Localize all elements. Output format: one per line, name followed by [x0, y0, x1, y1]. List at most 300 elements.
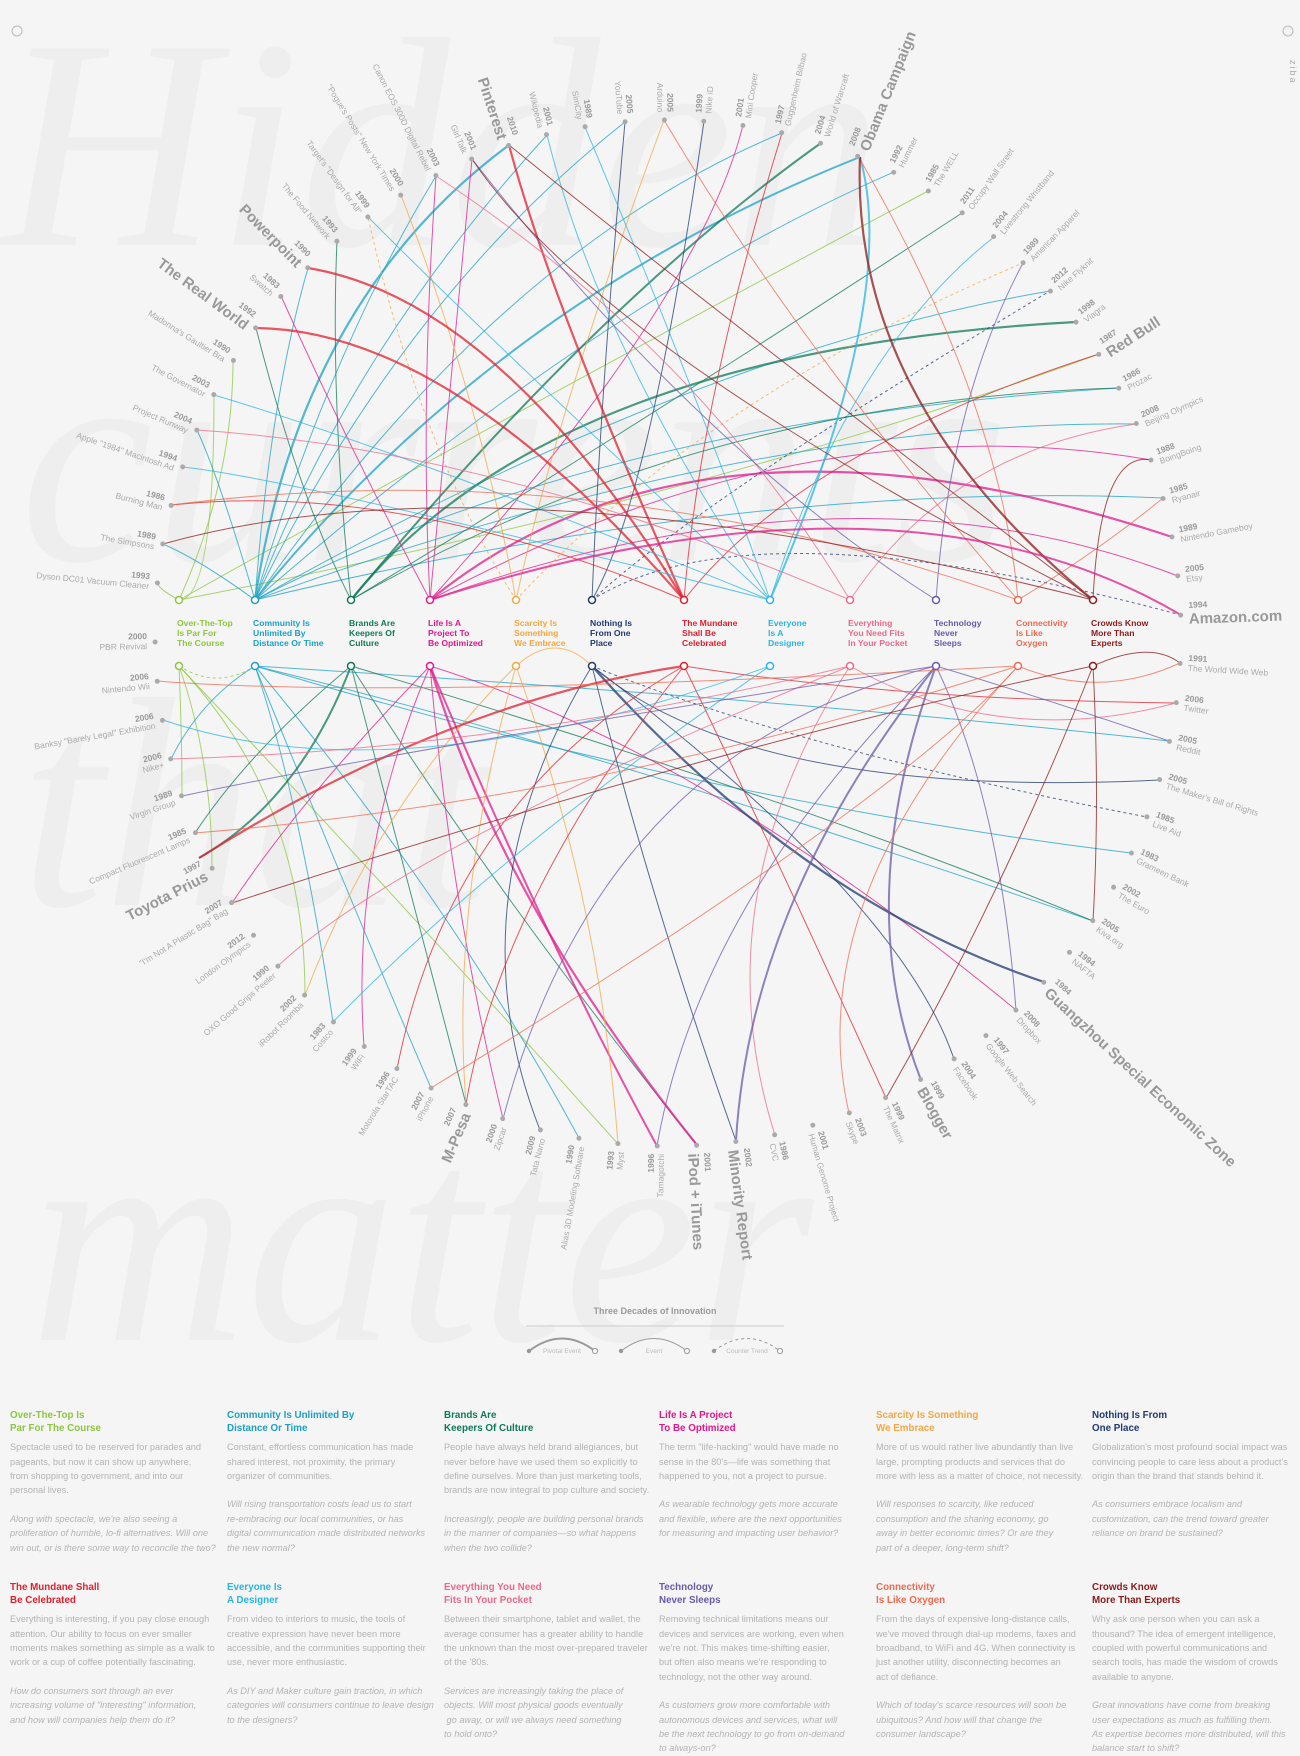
event nodes and labels: right side	[684, 25, 1282, 1261]
description: Connectivity: Connectivity	[876, 1582, 935, 1593]
logo ziba: ziba	[1288, 60, 1298, 85]
description: Crowds: Crowds Know	[1092, 1582, 1157, 1593]
event nodes and labels: right side: Twitter	[1183, 703, 1209, 716]
description: Brands: never before have we used them so explicitly to	[444, 1457, 638, 1467]
description: Over-The-Top: Par For The Course	[10, 1423, 101, 1434]
description: Crowds	[1092, 1582, 1286, 1753]
category labels: Experts	[1091, 638, 1123, 648]
description: Scarcity: Scarcity Is Something	[876, 1410, 978, 1421]
event nodes and labels: right side: Nike Flyknit	[1056, 255, 1096, 292]
description: Connectivity	[876, 1582, 1076, 1739]
event nodes and labels: right side: Livestrong Wristband	[998, 168, 1056, 236]
description: Brands: brands are now integral to pop culture and society.	[444, 1485, 649, 1495]
event nodes and labels: right side: 2005	[1185, 562, 1205, 574]
description: Everyone Is A Designer	[226, 1582, 434, 1725]
event nodes and labels: left side: 1990	[211, 337, 233, 355]
event nodes and labels: left side: Nike+	[141, 760, 165, 775]
background title text: that	[20, 638, 497, 970]
event nodes and labels: right side: 1994	[1076, 949, 1098, 968]
category labels: Unlimited By	[253, 628, 306, 638]
event nodes and labels: right side: iPod + iTunes	[684, 1153, 706, 1251]
connection lines	[157, 120, 1181, 1146]
description: Crowds: balance start to shift?	[1092, 1743, 1179, 1753]
description: Connectivity: we've moved through dial-up modems, faxes and	[876, 1629, 1076, 1639]
event nodes and labels: left side: 2006	[142, 750, 163, 764]
category labels: Celebrated	[682, 638, 726, 648]
description: Mundane: Everything is interesting, if you pay close enough	[10, 1614, 209, 1624]
event nodes and labels: right side: 2005	[1177, 732, 1198, 746]
event nodes and labels: right side: Occupy Wall Street	[966, 146, 1016, 211]
category labels: The Mundane	[682, 618, 738, 628]
description: Over-The-Top: personal lives.	[10, 1485, 69, 1495]
event nodes and labels: right side: Grameen Bank	[1135, 856, 1191, 889]
description: Nothing Is From One Place: convincing people to care less about a product's	[1092, 1457, 1288, 1467]
description: Community: re-embracing our local communities, or has	[227, 1514, 403, 1524]
description: Crowds: thousand? The idea of emergent intelligence,	[1092, 1629, 1276, 1639]
description: Over-The-Top	[10, 1410, 216, 1553]
event nodes and labels: left side: Burning Man	[114, 490, 164, 512]
description: Brands	[444, 1410, 649, 1553]
event nodes and labels: left side: 2005	[624, 94, 635, 114]
category labels: Something	[514, 628, 558, 638]
description: Crowds: As expertise becomes more distributed, will this	[1092, 1729, 1286, 1739]
event nodes and labels: left side: 1997	[181, 859, 203, 876]
description: Connectivity: consumer landscape?	[876, 1729, 966, 1739]
event nodes and labels: right side: 1992	[887, 143, 905, 165]
category labels: Is A	[768, 628, 783, 638]
description: Brands: define ourselves. More than just marketing tools,	[444, 1471, 642, 1481]
description: Scarcity: more with less as a matter of choice, not necessity.	[876, 1471, 1083, 1481]
event nodes and labels: left side: 1989	[582, 98, 595, 119]
category labels: Crowds Know	[1091, 618, 1149, 628]
event nodes and labels: right side: 2001	[816, 1130, 831, 1151]
description: Technology: autonomous devices and services, what will	[659, 1715, 837, 1725]
event nodes and labels: right side: 1988	[1155, 441, 1176, 456]
description: Connectivity: Which of today's scarce resources will soon be	[876, 1700, 1066, 1710]
description: Over-The-Top: from shopping to government, and into our	[10, 1471, 183, 1481]
description: Crowds: user expectations as much as fulfilling them.	[1092, 1715, 1272, 1725]
event nodes and labels: left side: 2007	[442, 1106, 458, 1127]
category labels: Be Optimized	[428, 638, 483, 648]
category labels: Designer	[768, 638, 805, 648]
description: Nothing Is From One Place: As consumers embrace localism and	[1092, 1499, 1242, 1509]
description: Community: Constant, effortless communication has made	[227, 1442, 413, 1452]
description: Crowds: search tools, has made the wisdom of crowds	[1092, 1657, 1278, 1667]
event nodes and labels: right side: Guggenheim Bilbao	[782, 52, 809, 127]
event nodes and labels: left side: 2006	[134, 711, 155, 724]
description: Over-The-Top: Spectacle used to be reserved for parades and	[10, 1442, 201, 1452]
description: Mundane: moments makes something as simple as a walk to	[10, 1643, 215, 1653]
event nodes and labels: right side: 2012	[1049, 265, 1070, 285]
event nodes and labels: left side: 2009	[523, 1135, 538, 1156]
description: Life Is A Project: sense in the 80's—life was something that	[659, 1457, 830, 1467]
description: Technology: Removing technical limitations means our	[659, 1614, 829, 1624]
description: Connectivity: Is Like Oxygen	[876, 1595, 945, 1606]
description: Community: digital communication made distributed networks	[227, 1528, 425, 1538]
event nodes and labels: left side: 2004	[173, 409, 194, 426]
description: Scarcity: away in better economic times? Or are they	[876, 1528, 1053, 1538]
category labels	[177, 618, 1149, 648]
event nodes and labels: left side: YouTube	[613, 80, 625, 115]
category labels: Everything	[848, 618, 892, 628]
description: Pocket: objects. Will most physical goods eventually	[444, 1700, 623, 1710]
event nodes and labels: left side: The Simpsons	[100, 532, 155, 551]
event nodes and labels: left side: Tata Nano	[528, 1137, 547, 1177]
event nodes and labels: right side: The Maker's Bill of Rights	[1165, 781, 1260, 818]
event nodes and labels: left side: Wikipedia	[527, 91, 546, 129]
event nodes and labels: left side: 1985	[166, 825, 188, 842]
event nodes and labels: right side: 2002	[742, 1147, 754, 1168]
event nodes and labels: left side: 1993	[131, 569, 151, 581]
description: Nothing Is From One Place: origin than the brand that stands behind it.	[1092, 1471, 1264, 1481]
description: Scarcity: part of a deeper, long-term shift?	[876, 1543, 1009, 1553]
event nodes and labels: left side: 2003	[190, 372, 212, 390]
description: Mundane: work or a cup of coffee potentially fascinating.	[10, 1657, 196, 1667]
description: Mundane: increasing volume of "interesting" information,	[10, 1700, 196, 1710]
description: Over-The-Top: win out, or is there some way to reconcile the two?	[10, 1543, 216, 1553]
description: Scarcity	[876, 1410, 1083, 1553]
event nodes and labels: left side: iPhone	[414, 1094, 436, 1123]
event nodes and labels: left side: Apple "1984" Macintosh Ad	[75, 430, 176, 473]
event nodes and labels: left side: 2005	[665, 93, 675, 112]
category labels: The Course	[177, 638, 224, 648]
event nodes and labels: left side: 2002	[278, 993, 298, 1013]
description: Mundane: The Mundane Shall	[10, 1582, 99, 1593]
description: Brands: Increasingly, people are building personal brands	[444, 1514, 644, 1524]
description: Pocket: Between their smartphone, tablet and wallet, the	[444, 1614, 641, 1624]
description: Community: Community Is Unlimited By	[227, 1410, 354, 1421]
event nodes and labels: left side: Banksy "Barely Legal" Exhibition	[33, 721, 156, 751]
event nodes and labels: right side: 1985	[1168, 481, 1189, 495]
event nodes and labels: right side: Etsy	[1186, 572, 1204, 584]
event nodes and labels: left side	[32, 58, 675, 1250]
description: Life Is A Project: for measuring and impacting user behavior?	[659, 1528, 838, 1538]
category labels: More Than	[1091, 628, 1134, 638]
description: Scarcity: Will responses to scarcity, like reduced	[876, 1499, 1034, 1509]
description: Everyone Is A Designer: As DIY and Maker culture gain traction, in which	[227, 1686, 422, 1696]
description: Over-The-Top: proliferation of humble, lo-fi alternatives. Will one	[10, 1528, 208, 1538]
description: Pocket: of the '80s.	[444, 1657, 489, 1667]
description: Technology: devices and services are working, even when	[659, 1629, 844, 1639]
description: Everyone Is A Designer: creative expression have never been more	[227, 1629, 401, 1639]
event nodes and labels: right side: 2005	[1100, 916, 1121, 935]
event nodes and labels: left side: 2007	[409, 1090, 427, 1111]
event nodes and labels: left side: WiFi	[349, 1052, 367, 1072]
event nodes and labels: left side: 1983	[308, 1021, 328, 1042]
description: Community: Distance Or Time	[227, 1423, 307, 1434]
description: Mundane	[10, 1582, 215, 1725]
event nodes and labels: right side: 2002	[1121, 882, 1143, 900]
event nodes and labels: left side: 2000	[484, 1122, 499, 1144]
event nodes and labels: left side: 1993	[604, 1150, 616, 1170]
description: Connectivity: ubiquitous? And how will that change the	[876, 1715, 1042, 1725]
event nodes and labels: left side: PBR Revival	[99, 641, 147, 652]
event nodes and labels: right side: Minority Report	[724, 1149, 756, 1261]
event nodes and labels: left side: iRobot Roomba	[256, 1000, 305, 1049]
legend: Pivotal Event	[543, 1348, 581, 1355]
description: Everyone Is A Designer: use, never more enthusiastic.	[227, 1657, 347, 1667]
event nodes and labels: right side: Beijing Olympics	[1143, 394, 1205, 428]
event nodes and labels: right side: Mini Cooper	[743, 72, 760, 119]
event nodes and labels: right side: Amazon.com	[1189, 608, 1282, 628]
event nodes and labels: right side: 1994	[1188, 599, 1208, 610]
event nodes and labels: right side: The Matrix	[881, 1104, 907, 1146]
event nodes and labels: right side: Live Aid	[1151, 819, 1183, 839]
event nodes and labels: left side: Powerpoint	[236, 201, 305, 271]
event nodes and labels: left side: Zipcar	[492, 1126, 509, 1151]
event nodes and labels: left side: "I'm Not A Plastic Bag" Bag	[137, 906, 230, 968]
event nodes and labels: left side: 2001	[462, 130, 479, 152]
event nodes and labels: left side: 1996	[646, 1153, 656, 1173]
description: Pocket: average consumer has a greater ability to handle	[444, 1629, 643, 1639]
description: Mundane: Be Celebrated	[10, 1595, 76, 1606]
description: Scarcity: large, prompting products and services that do	[876, 1457, 1065, 1467]
event nodes and labels: right side: 2003	[853, 1116, 869, 1138]
category labels: Scarcity Is	[514, 618, 557, 628]
event nodes and labels: right side: 2004	[959, 1059, 978, 1081]
event nodes and labels: right side: 2008	[1139, 402, 1161, 419]
event nodes and labels: left side: Myst	[614, 1151, 626, 1170]
background title text: currents	[20, 293, 1009, 625]
description: Technology: As customers grow more comfortable with	[659, 1700, 830, 1710]
event nodes and labels: right side: Skype	[844, 1120, 862, 1146]
event nodes and labels: left side: 1999	[339, 1046, 359, 1068]
description: Technology: technology, not the other way around.	[659, 1672, 812, 1682]
description: Everyone Is A Designer: Everyone Is	[227, 1582, 282, 1593]
event nodes and labels: right side: 1986	[777, 1140, 791, 1161]
description: Over-The-Top: Over-The-Top Is	[10, 1410, 84, 1421]
category labels: Over-The-Top	[177, 618, 233, 628]
event nodes and labels: left side: 1996	[373, 1069, 392, 1091]
description: Community: Will rising transportation costs lead us to start	[227, 1499, 412, 1509]
description: Mundane: attention. Our ability to focus on ever smaller	[10, 1629, 192, 1639]
description: Brands: in the manner of companies—so what happens	[444, 1528, 636, 1538]
event nodes and labels: right side: 1999	[929, 1079, 947, 1101]
legend: Counter Trend	[726, 1348, 768, 1355]
background title text	[0, 0, 1009, 1405]
event nodes and labels: right side: Kiva.org	[1094, 924, 1126, 950]
legend: Event	[646, 1348, 663, 1355]
category labels: Keepers Of	[349, 628, 395, 638]
category labels: Is Like	[1016, 628, 1043, 638]
event nodes and labels: right side: 1997	[773, 104, 787, 125]
category nodes	[176, 596, 1096, 670]
description: Life Is A Project: and flexible, where are the next opportunities	[659, 1514, 842, 1524]
event nodes and labels: right side: Hummer	[896, 135, 920, 169]
description: Life Is A Project: The term "life-hacking" would have made no	[659, 1442, 839, 1452]
description: Technology: Technology	[659, 1582, 713, 1593]
event nodes and labels: left side: 1989	[136, 528, 157, 542]
description: Nothing Is From One Place: reliance on brand be sustained?	[1092, 1528, 1223, 1538]
event nodes and labels: left side: Girl Talk	[449, 123, 470, 156]
category labels: Place	[590, 638, 613, 648]
event nodes and labels: right side: The Euro	[1116, 890, 1152, 916]
event nodes and labels: right side: The World Wide Web	[1188, 663, 1269, 678]
event nodes and labels: left side: 1989	[152, 788, 174, 803]
description: Technology: Never Sleeps	[659, 1595, 721, 1606]
description: Over-The-Top: Along with spectacle, we're also seeing a	[10, 1514, 177, 1524]
category labels: Oxygen	[1016, 638, 1048, 648]
event nodes and labels: left side: Motorola StarTAC	[356, 1075, 400, 1137]
category labels: Technology	[934, 618, 982, 628]
description: Brands: People have always held brand allegiances, but	[444, 1442, 638, 1452]
description: Everyone Is A Designer: A Designer	[227, 1595, 278, 1606]
description: Crowds: More Than Experts	[1092, 1595, 1180, 1606]
event nodes and labels: right side: Blogger	[913, 1084, 956, 1142]
event nodes and labels: left side: 1990	[250, 963, 271, 983]
category labels: Life Is A	[428, 618, 461, 628]
description: Brands: when the two collide?	[444, 1543, 532, 1553]
category labels: In Your Pocket	[848, 638, 908, 648]
event nodes and labels: left side: Tamagotchi	[655, 1154, 666, 1198]
description: Scarcity: More of us would rather live abundantly than live	[876, 1442, 1073, 1452]
event nodes and labels: right side: Red Bull	[1103, 314, 1164, 361]
event nodes and labels: left side: 2006	[129, 671, 149, 683]
event nodes and labels: left side: Toyota Prius	[123, 868, 211, 925]
event nodes and labels: right side: 2008	[1022, 1008, 1042, 1029]
description: Technology: but often also means we're responding to	[659, 1657, 827, 1667]
event nodes and labels: right side: 2005	[1168, 771, 1189, 786]
event nodes and labels: left side: 1992	[237, 300, 258, 319]
event nodes and labels: right side: Google Web Search	[984, 1041, 1039, 1108]
description: Brands: Brands Are	[444, 1410, 496, 1421]
event nodes and labels: left side: OXO Good Grips Peeler	[201, 970, 278, 1038]
event nodes and labels: left side: 2000	[128, 631, 147, 641]
event nodes and labels: right side: Dropbox	[1015, 1015, 1044, 1046]
legend	[526, 1306, 784, 1355]
event nodes and labels: right side: 2008	[847, 126, 863, 147]
description: Crowds: Great innovations have come from breaking	[1092, 1700, 1270, 1710]
description: Everyone Is A Designer: accessible, and the communities supporting their	[227, 1643, 426, 1653]
event nodes and labels: left side: Compact Fluorescent Lamps	[88, 835, 192, 886]
description: Everyone Is A Designer: to the designers?	[227, 1715, 298, 1725]
event nodes and labels: left side: Project Runway	[131, 402, 191, 435]
event nodes and labels: right side: NAFTA	[1070, 957, 1098, 982]
event nodes and labels: right side: Ryanair	[1171, 488, 1202, 505]
event nodes and labels: right side: 1986	[1121, 366, 1142, 384]
description: Nothing Is From One Place: customization, can the trend toward greater	[1092, 1514, 1269, 1524]
event nodes and labels: right side: Nintendo Gameboy	[1180, 521, 1254, 544]
event nodes and labels: left side: 2010	[505, 115, 520, 136]
background title text: matter	[30, 1073, 818, 1405]
description: Community	[227, 1410, 425, 1553]
event nodes and labels: right side: 1989	[1178, 521, 1198, 534]
description: Connectivity: just another utility, disconnecting becomes an	[876, 1657, 1061, 1667]
category labels: Everyone	[768, 618, 807, 628]
category labels: We Embrace	[514, 638, 566, 648]
event nodes and labels: right side: 1991	[1188, 653, 1208, 664]
description: Crowds: Why ask one person when you can ask a	[1092, 1614, 1260, 1624]
event nodes and labels: right side: 2006	[1184, 693, 1205, 705]
event nodes and labels: left side: "Pogue's Posts" New York Times	[325, 82, 397, 193]
event nodes and labels: right side: 2004	[812, 114, 828, 135]
event nodes and labels: left side: M-Pesa	[438, 1110, 475, 1165]
category labels: From One	[590, 628, 631, 638]
description: Over-The-Top: pageants, but now it can show up anywhere,	[10, 1457, 191, 1467]
description: Community: the new normal?	[227, 1543, 295, 1553]
event nodes and labels: left side: 2000	[388, 166, 406, 188]
event nodes and labels: left side: Pinterest	[474, 76, 510, 142]
description: Life Is A Project: As wearable technology gets more accurate	[659, 1499, 838, 1509]
event nodes and labels: right side: American Apparel	[1028, 208, 1082, 263]
category labels: Shall Be	[682, 628, 716, 638]
description: Technology	[658, 1582, 845, 1753]
event nodes and labels: right side: 2001	[733, 97, 746, 117]
event nodes and labels: right side: 1999	[693, 93, 705, 113]
event nodes and labels: right side: World of Warcraft	[822, 72, 851, 138]
event nodes and labels: left side: 2012	[225, 931, 247, 950]
description: Technology: be the next technology to go from on-demand	[659, 1729, 844, 1739]
event nodes and labels: right side: 1985	[1155, 809, 1176, 826]
description: Brands: Keepers Of Culture	[444, 1423, 533, 1434]
event nodes and labels: left side: SimCity	[570, 90, 585, 121]
description: Mundane: and how will companies help them do it?	[10, 1715, 175, 1725]
description: Pocket: Services are increasingly taking the place of	[444, 1686, 623, 1696]
event nodes and labels: left side: 1986	[145, 488, 166, 503]
event nodes and labels: right side: Facebook	[951, 1065, 981, 1102]
event nodes and labels: left side: 1990	[563, 1144, 577, 1165]
description: Scarcity: We Embrace	[876, 1423, 935, 1434]
description: Life Is A Project: To Be Optimized	[659, 1423, 736, 1434]
event nodes and labels: right side: 1983	[1139, 847, 1161, 864]
description: Nothing Is From One Place: Nothing Is From	[1092, 1410, 1167, 1421]
category labels: Is Par For	[177, 628, 217, 638]
category labels: Never	[934, 628, 959, 638]
description: Pocket: to hold onto?	[444, 1729, 497, 1739]
event nodes and labels: right side: 2004	[990, 209, 1010, 230]
event nodes and labels: left side: London Olympics	[193, 939, 252, 986]
category labels: Brands Are	[349, 618, 395, 628]
description: Life Is A Project	[658, 1410, 842, 1538]
description: Connectivity: act of defiance.	[876, 1672, 938, 1682]
description: Pocket	[444, 1582, 648, 1739]
event nodes and labels: left side: Arduino	[655, 83, 665, 112]
event nodes and labels: left side: 1983	[261, 270, 282, 291]
event nodes and labels: right side: The WELL	[932, 149, 961, 189]
description: Technology: to always-on?	[659, 1743, 716, 1753]
event nodes and labels: left side: 2003	[425, 147, 442, 168]
event nodes and labels: left side: The Governator	[150, 362, 207, 399]
event nodes and labels: left side: 2007	[203, 897, 224, 916]
event nodes and labels: right side: Guangzhou Special Economic Zone	[1041, 985, 1239, 1171]
event nodes and labels: right side: 1984	[1053, 977, 1074, 997]
category labels: Sleeps	[934, 638, 962, 648]
description: Pocket: the unknown than the most over-prepared traveler	[444, 1643, 648, 1653]
description: Community: shared interest, not proximity, the primary	[227, 1457, 395, 1467]
event nodes and labels: left side: The Real World	[154, 255, 252, 334]
event nodes and labels: right side: 2001	[702, 1152, 713, 1172]
description: Pocket: Fits In Your Pocket	[444, 1595, 532, 1606]
category labels: Connectivity	[1016, 618, 1068, 628]
event nodes and labels: right side: 1985	[923, 162, 941, 184]
event nodes and labels: left side: Virgin Group	[128, 797, 177, 822]
event nodes and labels: right side: 1999	[890, 1100, 907, 1122]
description: Connectivity: From the days of expensive long-distance calls,	[876, 1614, 1070, 1624]
event nodes and labels: left side: Madonna's Gaultier Bra	[146, 308, 227, 364]
description: Community: organizer of communities.	[227, 1471, 332, 1481]
event nodes and labels: left side: Nintendo Wii	[101, 681, 150, 696]
description: Everyone Is A Designer: categories will consumers continue to leave design	[227, 1700, 434, 1710]
event nodes and labels: right side: 1987	[1097, 327, 1119, 346]
description: Pocket: go away, or will we always need something	[447, 1715, 622, 1725]
description: Life Is A Project: happened to you, not a project to pursue.	[659, 1471, 827, 1481]
event nodes and labels: right side: 1998	[1076, 297, 1097, 316]
description: Mundane: How do consumers sort through an ever	[10, 1686, 173, 1696]
event nodes and labels: left side: 1993	[320, 214, 340, 235]
event nodes and labels: right side: Reddit	[1175, 742, 1202, 757]
description: Nothing Is From One Place: Globalization's most profound social impact was	[1092, 1442, 1287, 1452]
event nodes and labels: right side: Viagra	[1082, 302, 1108, 324]
